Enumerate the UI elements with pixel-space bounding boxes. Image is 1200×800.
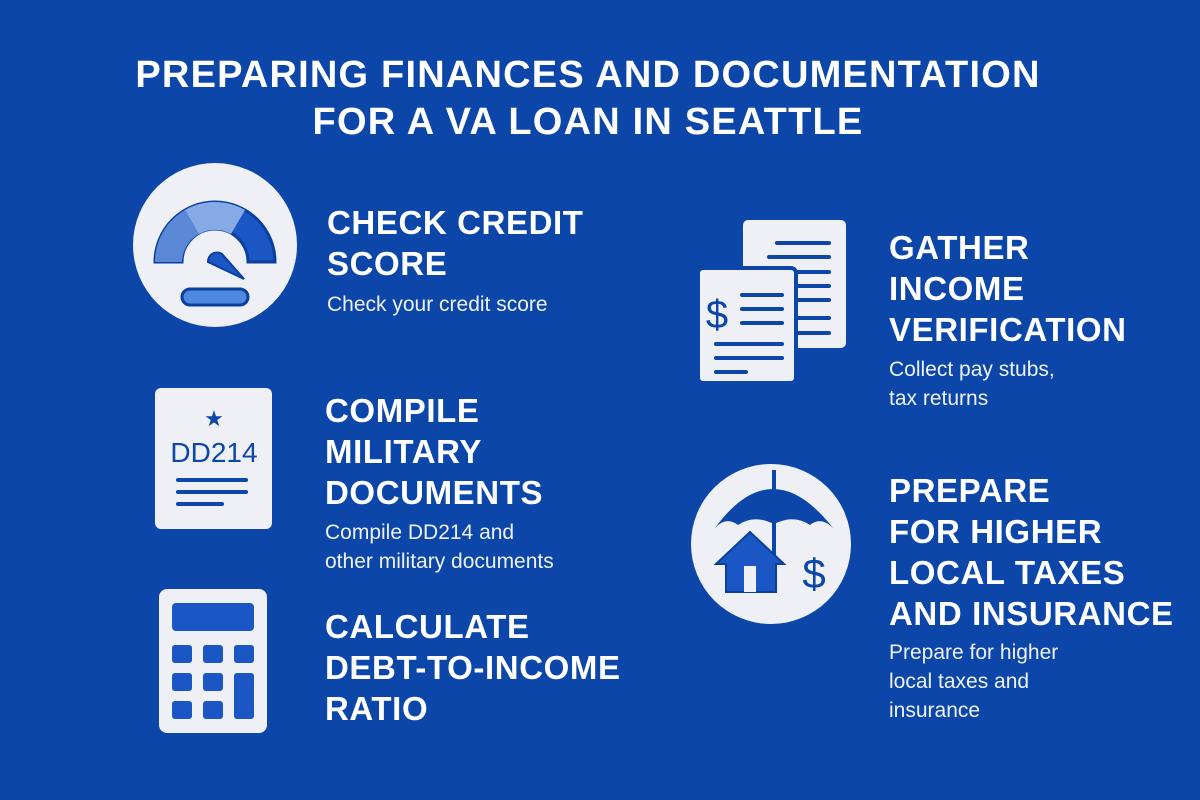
heading: prepare for higher taxes: FOR HIGHER xyxy=(889,513,1102,550)
heading: check credit score: SCORE xyxy=(327,245,447,282)
text: gather: Collect pay stubs, xyxy=(889,358,1055,381)
heading: prepare for higher taxes: AND INSURANCE xyxy=(889,595,1174,632)
heading: check credit score xyxy=(327,204,584,282)
text: compile: Compile DD214 and xyxy=(325,521,514,544)
icon: credit gauge xyxy=(133,163,297,327)
text: compile: other military documents xyxy=(325,550,554,573)
heading: prepare for higher taxes: LOCAL TAXES xyxy=(889,554,1125,591)
heading: check credit score: CHECK CREDIT xyxy=(327,204,584,241)
text: prepare: insurance xyxy=(889,699,980,722)
text: compile xyxy=(325,521,554,573)
heading: compile military documents: COMPILE xyxy=(325,392,480,429)
text: gather xyxy=(889,358,1055,410)
heading: prepare for higher taxes xyxy=(889,472,1174,632)
heading: compile military documents: MILITARY xyxy=(325,433,482,470)
heading: calculate DTI: DEBT-TO-INCOME xyxy=(325,649,621,686)
icon: DD214 document: ★ xyxy=(204,406,224,431)
heading: calculate DTI: CALCULATE xyxy=(325,608,530,645)
title: PREPARING FINANCES AND DOCUMENTATION xyxy=(135,54,1041,96)
title: FOR A VA LOAN IN SEATTLE xyxy=(313,101,863,143)
heading: prepare for higher taxes: PREPARE xyxy=(889,472,1050,509)
icon: DD214 document: DD214 xyxy=(170,437,258,468)
heading: calculate DTI xyxy=(325,608,621,727)
heading: gather income verification: VERIFICATION xyxy=(889,311,1127,348)
heading: gather income verification: GATHER xyxy=(889,229,1029,266)
heading: gather income verification: INCOME xyxy=(889,270,1025,307)
icon: calculator xyxy=(159,589,267,733)
heading: compile military documents: DOCUMENTS xyxy=(325,474,543,511)
icon: DD214 document xyxy=(155,388,272,529)
icon: umbrella house xyxy=(691,464,851,624)
heading: calculate DTI: RATIO xyxy=(325,690,428,727)
title xyxy=(135,54,1041,143)
text: prepare: local taxes and xyxy=(889,670,1029,693)
text: gather: tax returns xyxy=(889,387,988,410)
icon: umbrella house: $ xyxy=(802,550,826,597)
text: prepare xyxy=(889,641,1058,722)
text: check credit: Check your credit score xyxy=(327,293,548,316)
heading: compile military documents xyxy=(325,392,543,511)
heading: gather income verification xyxy=(889,229,1127,348)
icon: income documents: $ xyxy=(706,293,728,337)
text: prepare: Prepare for higher xyxy=(889,641,1058,664)
icon: income documents xyxy=(700,220,846,381)
